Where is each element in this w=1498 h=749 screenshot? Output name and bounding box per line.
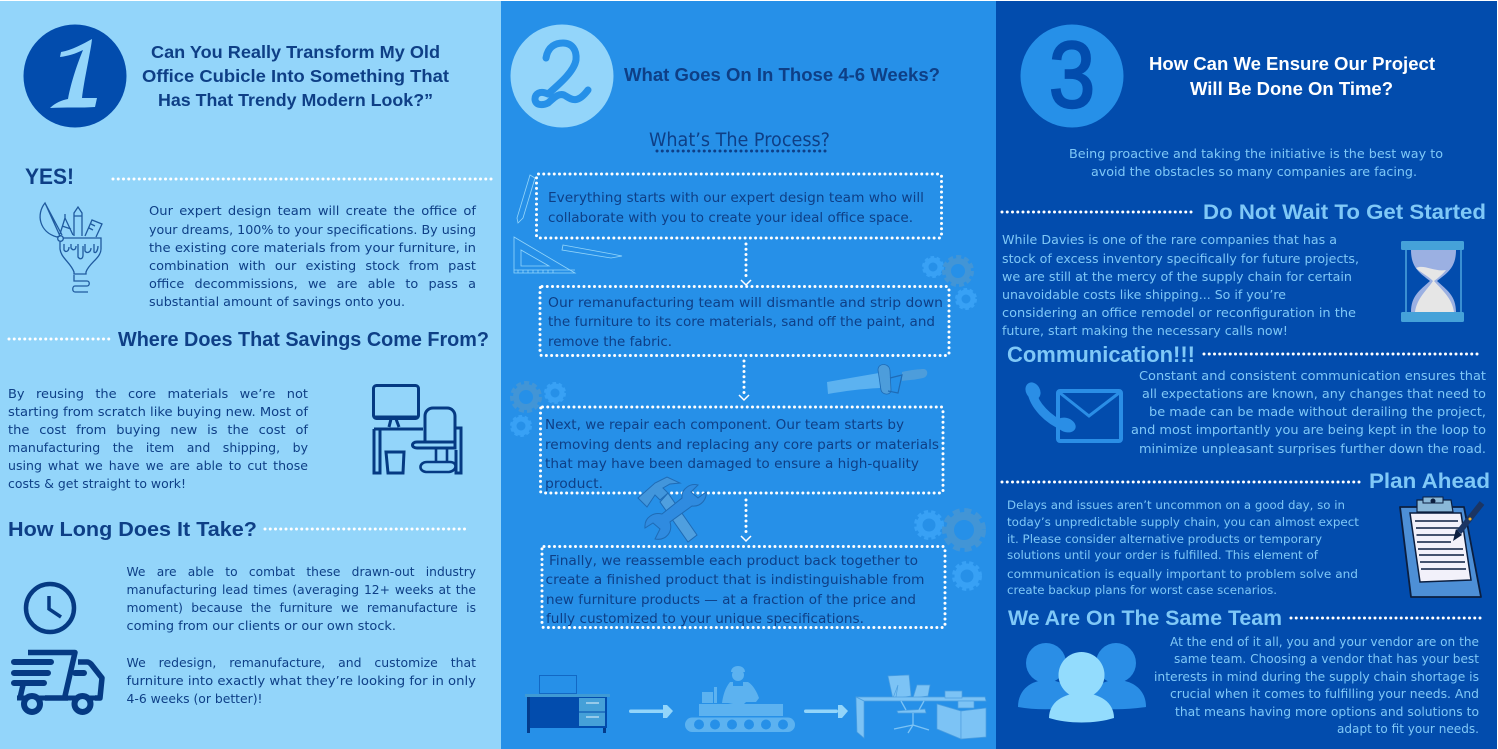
text: savings — [8, 386, 309, 491]
text: communication: be made can be made without derailing the project, — [1149, 405, 1486, 419]
text: do not wait: While Davies is one of the rare companies that has a — [1002, 233, 1337, 247]
panel 3 content — [1002, 22, 1490, 736]
text: introduction: Being proactive and taking the initiative is the best way to — [1069, 147, 1443, 161]
heading: question 1: Office Cubicle Into Something That — [142, 66, 449, 86]
icon: desk and chair — [374, 386, 461, 473]
process step 2: Our remanufacturing team will dismantle and strip down — [548, 296, 943, 311]
process step 3: that may have been damaged to ensure a high-quality — [545, 457, 919, 472]
arrow: step 3 to 4 — [741, 500, 751, 541]
text: savings: costs & get straight to work! — [8, 476, 186, 491]
heading: question 3 — [1149, 54, 1435, 99]
process step 4 — [542, 546, 945, 628]
text: design team: your dreams, 100% to your specifications. By using — [149, 222, 476, 237]
text: design team: substantial amount of savings onto you. — [149, 294, 405, 309]
text: do not wait: we are still at the mercy of the supply chain for certain — [1002, 270, 1352, 284]
heading: question 2: What Goes On In Those 4-6 Weeks? — [624, 65, 940, 85]
process step 3: product. — [545, 477, 603, 492]
icon: clipboard and pen — [1400, 497, 1482, 597]
text: same team: At the end of it all, you and your vendor are on the — [1170, 635, 1479, 649]
process step 4: create a finished product that is indistinguishable from — [546, 573, 924, 588]
panel 1 content — [8, 24, 492, 712]
process step 3: removing dents and replacing any core parts or materials — [545, 438, 939, 453]
panel: question 2 background — [501, 1, 996, 749]
heading: question 1: Has That Trendy Modern Look?” — [158, 90, 433, 110]
text: communication: minimize unpleasant surprises further down the road. — [1139, 442, 1486, 456]
icon: paint roller — [827, 364, 927, 394]
process step 3 — [540, 407, 943, 493]
heading: YES: YES! — [25, 164, 74, 189]
icon: design light bulb — [40, 203, 102, 292]
text: plan ahead: communication is equally important to problem solve and — [1007, 567, 1358, 581]
heading: how long: How Long Does It Take? — [8, 519, 257, 541]
text: lead times: We redesign, remanufacture, and customize that — [126, 655, 476, 670]
text: do not wait: considering an office remodel or reconfiguration in the — [1002, 306, 1356, 320]
text: design team: the existing core materials from your furniture, in — [149, 240, 476, 255]
icon: hourglass — [1401, 241, 1464, 322]
text: communication: Constant and consistent communication ensures that — [1139, 369, 1486, 383]
text: do not wait: unavoidable costs like shipping... So if you’re — [1002, 288, 1286, 302]
process step 2: the furniture to its core materials, sand off the paint, and — [548, 315, 935, 330]
text: lead times: 4-6 weeks (or better)! — [126, 691, 262, 706]
text: same team: interests in mind during the supply chain shortage is — [1154, 670, 1479, 684]
heading: do not wait: Do Not Wait To Get Started — [1203, 201, 1486, 224]
icon: gears left — [512, 383, 564, 436]
text: lead times: manufacturing lead times (averaging 12+ weeks at the — [126, 582, 476, 597]
icon: gears lower right — [916, 510, 984, 589]
process step 1 — [536, 174, 942, 238]
process step 2: remove the fabric. — [548, 335, 672, 350]
arrow: step 1 to 2 — [741, 244, 751, 285]
text: savings: the cost from buying new is the cost of — [8, 422, 309, 437]
icon: gears upper right — [924, 257, 976, 308]
process step 1: Everything starts with our expert design team who will — [548, 191, 924, 206]
icon: delivery truck — [14, 652, 102, 712]
process step 2 — [540, 286, 949, 356]
heading: question 3: How Can We Ensure Our Project — [1149, 54, 1435, 74]
text: same team: adapt to fit your needs. — [1337, 722, 1479, 736]
text: lead times: moment) because the furniture we remanufacture is — [126, 600, 476, 615]
arrow: step 2 to 3 — [739, 361, 749, 400]
text: communication: and most importantly you are being kept in the loop to — [1131, 423, 1486, 437]
text: same team — [1154, 635, 1479, 736]
text: lead times: coming from our clients or our own stock. — [126, 618, 396, 633]
number badge 3 — [1020, 22, 1124, 128]
heading: question 1 — [142, 42, 449, 110]
icon: team of people — [1018, 643, 1146, 722]
text: same team: same team. Choosing a vendor that has your best — [1174, 652, 1479, 666]
process step 1: collaborate with you to create your ideal office space. — [548, 211, 913, 226]
arrow: desk to factory — [629, 705, 673, 718]
heading: process: What’s The Process? — [649, 130, 830, 151]
icon: old desk — [525, 676, 610, 733]
text: savings: using what we have we are able to cut those — [8, 458, 308, 473]
text: plan ahead — [1007, 498, 1360, 597]
text: lead times: We are able to combat these drawn-out industry — [126, 564, 477, 579]
number badge 1 — [24, 24, 126, 128]
icon: factory worker on conveyor — [685, 666, 795, 732]
arrow: factory to office — [804, 705, 848, 718]
icon: pencil and set squares — [514, 175, 622, 273]
text: plan ahead: it. Please consider alternative products or temporary — [1007, 532, 1322, 546]
number badge 3: 3 — [1049, 22, 1095, 127]
text: communication: all expectations are known, any changes that need to — [1142, 387, 1486, 401]
text: savings: starting from scratch like buying new. Most of — [8, 404, 309, 419]
text: do not wait: future, start making the necessary calls now! — [1002, 324, 1288, 338]
text: design team: Our expert design team will create the office of — [149, 203, 477, 218]
text: design team: office decommissions, we are able to pass a — [149, 276, 476, 291]
text: plan ahead: solutions until your order is fulfilled. This element of — [1007, 548, 1319, 562]
panel: question 3 background — [996, 1, 1497, 749]
icon: phone and envelope — [1022, 380, 1121, 441]
process step 4: Finally, we reassemble each product back together to — [549, 554, 918, 569]
text: plan ahead: create backup plans for worst case scenarios. — [1007, 583, 1277, 597]
text: design team: combination with our existing stock from past — [149, 258, 476, 273]
text: introduction: avoid the obstacles so many companies are facing. — [1091, 165, 1417, 179]
text: introduction — [1069, 147, 1443, 179]
text: design team — [149, 203, 477, 309]
text: savings: manufacturing the item and shipping, by — [8, 440, 309, 455]
text: same team: that means having more options and solutions to — [1175, 705, 1479, 719]
text: do not wait: stock of excess inventory specifically for future projects, — [1002, 252, 1359, 266]
panel: question 1 background — [0, 1, 501, 749]
text: communication — [1131, 369, 1486, 456]
text: savings: By reusing the core materials we’re not — [8, 386, 308, 401]
heading: communication: Communication!!! — [1007, 342, 1195, 367]
process step 4: new furniture products — at a fraction of the price and — [546, 593, 916, 608]
heading: same team: We Are On The Same Team — [1008, 607, 1282, 630]
heading: question 1: Can You Really Transform My Old — [151, 42, 440, 62]
heading: savings: Where Does That Savings Come From? — [118, 329, 489, 351]
heading: plan ahead: Plan Ahead — [1369, 470, 1490, 493]
text: plan ahead: Delays and issues aren’t uncommon on a good day, so in — [1007, 498, 1345, 512]
heading: question 3: Will Be Done On Time? — [1190, 79, 1393, 99]
process step 3: Next, we repair each component. Our team starts by — [545, 418, 904, 433]
text: lead times — [126, 564, 477, 706]
text: lead times: furniture into exactly what they’re looking for in only — [126, 673, 477, 688]
panel 2 content — [510, 24, 986, 739]
process step 4: fully customized to your unique specifications. — [546, 612, 864, 627]
icon: clock — [26, 584, 74, 632]
icon: modern office — [856, 675, 986, 739]
text: plan ahead: today’s unpredictable supply chain, you can almost expect — [1007, 515, 1360, 529]
number badge 2 — [510, 24, 614, 128]
text: same team: crucial when it comes to fulfilling your needs. And — [1170, 687, 1479, 701]
text: do not wait — [1002, 233, 1359, 338]
icon: hammer and wrench — [638, 477, 706, 542]
